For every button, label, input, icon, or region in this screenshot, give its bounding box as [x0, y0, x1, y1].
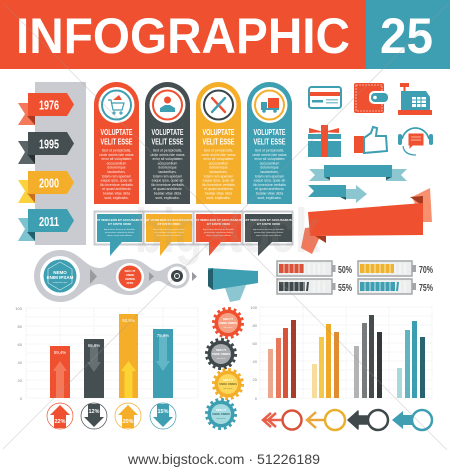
bar yellow 92.9%: 92,9% [122, 318, 135, 323]
gear teal: iste natus [217, 417, 225, 420]
pill column: person [145, 82, 190, 204]
speech bubble: dark [242, 212, 292, 256]
badge 12% [81, 403, 107, 429]
pill column: tools: VELIT ESSE [202, 136, 235, 146]
icon: headset [398, 128, 433, 155]
battery 50%: 50% [338, 265, 352, 276]
pill column: delivery: VELIT ESSE [254, 136, 286, 146]
timeline panel [18, 82, 86, 245]
pill column: person: VELIT ESSE [152, 136, 184, 146]
ribbon 2011: 2011 [39, 214, 59, 229]
speech bubble: teal: atque corrupti quos dolores [107, 234, 132, 237]
gear red: iste natus [224, 326, 232, 329]
node: red circle: OMNIS [125, 277, 135, 281]
badge 12%: 12% [88, 409, 100, 415]
gear grey: UNDE OMNIS [212, 352, 230, 356]
pill column: tools: beatae vitae dicta [205, 192, 232, 196]
battery 55%: 55% [338, 283, 352, 294]
gear yellow: UNDE OMNIS [219, 382, 237, 386]
speech bubble: yellow: praesentium voluptatum deleniti [154, 231, 184, 234]
speech bubble: teal: AT VERO EOS ET ACCUSAMUS [96, 218, 143, 222]
pill column: person: VOLUPTATE [152, 127, 184, 137]
gear grey [207, 340, 235, 368]
speech bubble: teal [94, 212, 144, 256]
pill column: delivery: sunt, explicabo. [257, 196, 282, 200]
icon: credit card [309, 87, 341, 108]
pill column: tools: unde omnis iste natus [201, 153, 236, 157]
pill column: delivery: totam rem aperiam [255, 174, 284, 178]
gear red: UNDE OMNIS [219, 321, 237, 325]
title: INFOGRAPHIC [16, 8, 350, 64]
arrow [90, 269, 97, 284]
pill column: shopping: et quasi architecto [102, 187, 131, 191]
node: red circle [116, 263, 144, 291]
icon: cart [108, 95, 124, 114]
bar teal 75.9%: 75,9% [157, 333, 169, 338]
pill column: tools: error sit voluptatem [204, 157, 234, 161]
pill column: tools: et quasi architecto [204, 187, 233, 191]
left bar chart: 40 [18, 360, 23, 365]
speech bubble: yellow: dignissimos ducimus qui blanditiis [153, 228, 185, 231]
bar group teal [397, 321, 425, 398]
badge 15%: 15% [157, 409, 169, 415]
pill column: shopping: Sed ut perspiciatis, [102, 148, 131, 152]
pill column: shopping: unde omnis iste natus [99, 153, 134, 157]
right bar chart: 40 [253, 359, 258, 364]
ribbon 1995: 1995 [39, 136, 59, 152]
speech bubble: dark: praesentium voluptatum deleniti [254, 231, 284, 234]
pill column: shopping: illo inventore veritatis [100, 183, 133, 187]
bar group yellow [312, 324, 339, 398]
battery 70%: 70% [419, 265, 433, 276]
process connector circles [34, 250, 197, 302]
bar yellow 92.9% [119, 314, 138, 398]
left bar chart: 20 [18, 378, 23, 383]
icon: thumbs up [354, 127, 387, 153]
pill column: delivery: VOLUPTATE [254, 127, 286, 137]
pill column: tools: Sed ut perspiciatis, [204, 148, 233, 152]
bar red 59.4%: 59,4% [54, 350, 66, 355]
arrow circle dark [348, 410, 388, 430]
pill column: delivery: eaque ipsa, quae ab [254, 179, 285, 183]
bar dark 65.9% [84, 339, 104, 398]
arrow [192, 272, 197, 281]
watermark: bigstock [135, 197, 320, 266]
pill column: tools: eaque ipsa, quae ab [203, 179, 234, 183]
node: red circle: SED UT [124, 269, 136, 273]
pill column: person: eaque ipsa, quae ab [152, 179, 183, 183]
gear red: SED UT [223, 317, 233, 321]
left bar chart [15, 306, 198, 429]
gear teal: SED UT [216, 408, 226, 412]
right bar chart: 60 [253, 341, 258, 346]
bar group grey [354, 315, 382, 398]
icon: tools [212, 98, 225, 112]
ribbon 1976 [18, 93, 74, 125]
pill column: tools: doloremque [209, 166, 228, 170]
bar dark 65.9%: 65,9% [88, 343, 100, 348]
node: dark circle [168, 266, 186, 286]
pill column: tools: illo inventore veritatis [202, 183, 235, 187]
pill column: shopping: error sit voluptatem [102, 157, 132, 161]
pill column: person: totam rem aperiam [153, 174, 182, 178]
speech bubble: yellow: ET IUSTO ODIO [158, 222, 181, 226]
node: red circle: ISTE [127, 281, 133, 285]
ribbon 2011 [18, 209, 74, 241]
pill column: delivery: accusantium [260, 161, 279, 165]
pill column: shopping: beatae vitae dicta [103, 192, 130, 196]
bar group red [268, 320, 296, 398]
node: teal hexagon: ENIM IPSAM [47, 275, 74, 280]
pill column: shopping: VELIT ESSE [100, 136, 133, 146]
pill column: tools: sunt, explicabo. [206, 196, 231, 200]
pill column: person: doloremque [158, 166, 177, 170]
speech bubble: dark: dignissimos ducimus qui blanditiis [253, 228, 284, 231]
pill column: shopping: totam rem aperiam [102, 174, 131, 178]
pill column: delivery: error sit voluptatem [255, 157, 285, 161]
ribbon 1995 [18, 132, 74, 164]
pill column: delivery: Sed ut perspiciatis, [255, 148, 284, 152]
speech bubble: yellow: atque corrupti quos dolores [156, 234, 182, 237]
pill column: tools: VOLUPTATE [202, 127, 235, 137]
speech bubble: red: ET IUSTO ODIO [207, 222, 231, 226]
node: teal hexagon [40, 256, 80, 296]
battery 75%: 75% [419, 283, 433, 294]
speech bubble: teal: ET IUSTO ODIO [108, 222, 132, 226]
right bar chart: 20 [253, 377, 258, 382]
ribbon banner [309, 165, 407, 181]
gear yellow: iste natus [224, 387, 232, 390]
arrow [149, 272, 154, 281]
speech bubble: yellow [144, 212, 194, 256]
speech bubble: yellow: AT VERO EOS ET ACCUSAMUS [146, 218, 192, 222]
speech bubble: dark: atque corrupti quos dolores [256, 234, 281, 237]
gear grey: SED UT [216, 348, 226, 352]
pill column: delivery [247, 82, 292, 204]
speech bubble: red: atque corrupti quos dolores [206, 234, 231, 237]
pill column: tools: laudantium, [209, 170, 228, 174]
pill column: person: sunt, explicabo. [155, 196, 180, 200]
right bar chart: 80 [253, 323, 258, 328]
battery 70% [358, 261, 433, 276]
gear teal: UNDE OMNIS [212, 412, 230, 416]
pill column: person: beatae vitae dicta [154, 192, 181, 196]
icon: truck [261, 98, 279, 113]
speech bubble: dark: ET IUSTO ODIO [257, 222, 281, 226]
speech bubble: red [194, 212, 244, 256]
teal folded ribbon [208, 268, 258, 302]
pill column: delivery: beatae vitae dicta [256, 192, 283, 196]
badge 22%: 22% [54, 419, 66, 425]
pill column: person: accusantium [158, 161, 177, 165]
ribbon arrow [308, 185, 367, 203]
arrow circle yellow [307, 410, 345, 430]
node: teal hexagon: voluptatem quia [53, 281, 68, 284]
left bar chart: 60 [18, 342, 23, 347]
header banner [0, 0, 450, 69]
battery 75% [358, 279, 433, 294]
pill column: delivery: doloremque [260, 166, 279, 170]
icon: cash register [398, 83, 432, 115]
pill column: tools [196, 82, 241, 204]
left bar chart: 100 [15, 306, 23, 311]
arrow circle teal [392, 410, 432, 430]
grey backing panel [35, 82, 86, 245]
pill column: tools: accusantium [209, 161, 228, 165]
pill column: delivery: et quasi architecto [255, 187, 284, 191]
badge 20% [115, 403, 141, 429]
ribbon 2000 [18, 171, 74, 203]
bar red 59.4% [50, 346, 70, 398]
pill column: delivery: unde omnis iste natus [252, 153, 287, 157]
pill column: person: Sed ut perspiciatis, [153, 148, 182, 152]
pill column: shopping [94, 82, 139, 204]
pill column: person: et quasi architecto [153, 187, 182, 191]
gear yellow [214, 370, 242, 398]
gear yellow: SED UT [223, 378, 233, 382]
pill column: person: laudantium, [158, 170, 177, 174]
speech bubble: teal: praesentium voluptatum deleniti [105, 231, 135, 234]
badge 15% [150, 403, 176, 429]
arrow circle red [263, 410, 302, 430]
pill column: person: illo inventore veritatis [151, 183, 184, 187]
icon: wallet [354, 83, 388, 113]
right bar chart [250, 305, 432, 401]
ribbon 1976: 1976 [39, 98, 59, 112]
pill column: shopping: laudantium, [107, 170, 126, 174]
gear red [214, 309, 242, 337]
pill column: shopping: accusantium [107, 161, 126, 165]
right bar chart: 100 [250, 305, 258, 310]
footer credit: www.bigstock.com · 51226189 [127, 451, 320, 467]
right bar chart: 0 [255, 396, 258, 401]
pill column: shopping: eaque ipsa, quae ab [101, 179, 132, 183]
pill column: person: unde omnis iste natus [150, 153, 185, 157]
speech bubble: red: praesentium voluptatum deleniti [204, 231, 234, 234]
speech bubble: red: dignissimos ducimus qui blanditiis [203, 228, 234, 231]
pill column: person: error sit voluptatem [153, 157, 183, 161]
number 25: 25 [380, 8, 433, 64]
pill column: shopping: VOLUPTATE [100, 127, 133, 137]
pill column: shopping: sunt, explicabo. [104, 196, 129, 200]
left bar chart: 0 [20, 396, 23, 401]
gear grey: iste natus [217, 357, 225, 360]
pill column: shopping: doloremque [107, 166, 126, 170]
icon: gift [308, 125, 341, 157]
gear teal [207, 400, 235, 428]
large red ribbon [301, 188, 432, 254]
ribbon 2000: 2000 [39, 176, 59, 190]
speech bubble: dark: AT VERO EOS ET ACCUSAMUS [245, 218, 292, 222]
pill column: tools: totam rem aperiam [204, 174, 233, 178]
badge 20%: 20% [122, 419, 134, 425]
icon: person [160, 96, 175, 112]
speech bubble: red: AT VERO EOS ET ACCUSAMUS [195, 218, 242, 222]
badge 22% [47, 403, 73, 429]
node: teal hexagon: NEMO [53, 270, 67, 275]
speech bubble: teal: dignissimos ducimus qui blanditiis [104, 228, 135, 231]
pill column: delivery: illo inventore veritatis [253, 183, 286, 187]
pill column: delivery: laudantium, [260, 170, 279, 174]
node: red circle: UNDE [126, 273, 134, 277]
bar teal 75.9% [153, 329, 173, 398]
battery 50% [277, 261, 352, 276]
battery 55% [277, 279, 352, 294]
left bar chart: 80 [18, 324, 23, 329]
